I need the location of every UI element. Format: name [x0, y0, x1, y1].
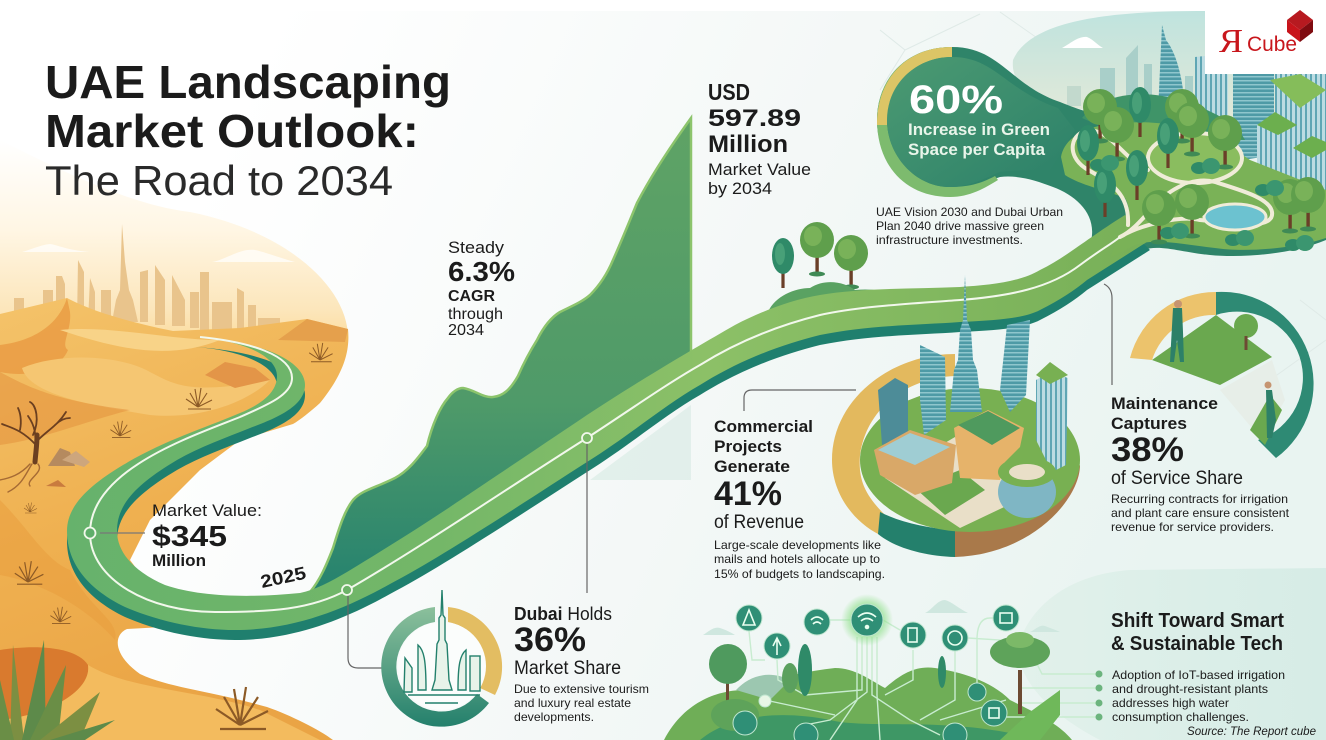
stat: CAGR: through: [448, 306, 503, 323]
road: [67, 215, 1150, 630]
stat: maintenance: [1111, 394, 1290, 534]
stat: smart tech: [1111, 610, 1285, 724]
icons: [733, 594, 1019, 740]
clouds: [703, 600, 1060, 635]
hill trees: [709, 632, 1060, 740]
pond: [1204, 204, 1266, 230]
stat: commercial: [714, 417, 885, 581]
stat: 2034 market value: Million: [708, 131, 788, 158]
stat: CAGR: 6.3%: [448, 256, 515, 287]
stat: maintenance: of Service Share: [1111, 468, 1243, 489]
title: Market Outlook:: [45, 105, 419, 157]
stat: green space: 60%: [909, 78, 1003, 122]
leader dots: [1096, 670, 1102, 720]
stat: Dubai share: [514, 604, 649, 724]
panel: park lawn and bubble: [877, 47, 1326, 258]
small tree: [1234, 314, 1258, 338]
title: UAE Landscaping: [45, 56, 451, 108]
logo: Я: [1219, 23, 1243, 60]
mall blocks: [874, 410, 1056, 518]
stat: green space: Space per Capita: [908, 140, 1046, 159]
year label 2025: 2025: [259, 563, 308, 592]
desert rocks: [46, 448, 90, 487]
park lawn: [1061, 122, 1326, 258]
tree backdrop: [1082, 94, 1245, 140]
text: vision: UAE Vision 2030 and Dubai Urban: [876, 205, 1063, 219]
stat: Dubai share: Market Share: [514, 658, 621, 679]
source note: Source: The Report cube: [1187, 724, 1316, 738]
text: vision: [876, 205, 1063, 247]
stat: CAGR: CAGR: [448, 288, 495, 305]
stat: 2025 market value: [152, 501, 262, 570]
sand dunes: [0, 298, 348, 740]
title: [45, 56, 451, 204]
text: vision: Plan 2040 drive massive green: [876, 219, 1044, 233]
stat: smart tech: Shift Toward Smart: [1111, 610, 1284, 632]
chart: growth area: [310, 118, 691, 592]
stat: commercial: 41%: [714, 475, 782, 513]
gardeners: [1170, 308, 1184, 362]
desert shrubs: [15, 343, 333, 729]
stat: commercial: Generate: [714, 457, 790, 476]
stat: commercial: Large-scale developments like: [714, 538, 881, 552]
desert clouds: [22, 244, 295, 262]
stat: maintenance: Captures: [1111, 414, 1187, 433]
desert sky: [0, 140, 348, 340]
road nodes and leader lines: [84, 284, 1112, 668]
stat: Dubai share: Due to extensive tourism: [514, 682, 649, 696]
stat: commercial: 15% of budgets to landscaping.: [714, 567, 885, 581]
stat: smart tech: consumption challenges.: [1112, 710, 1249, 724]
stat: CAGR: [448, 238, 515, 339]
buildings: [1195, 56, 1326, 198]
dead tree: [0, 402, 70, 492]
stat: 2025 market value: $345: [152, 521, 227, 553]
road trees: [768, 222, 900, 312]
stat: smart tech: and drought-resistant plants: [1112, 682, 1268, 696]
stat: commercial: mails and hotels allocate up to: [714, 552, 880, 566]
stat: Dubai share: and luxury real estate: [514, 696, 631, 710]
title: The Road to 2034: [45, 157, 393, 204]
icon: commercial district disc: [832, 275, 1080, 557]
stat: 2025 market value: Million: [152, 551, 206, 570]
stat: 2034 market value: USD: [708, 79, 750, 105]
stat: Dubai share: 36%: [514, 621, 586, 659]
park paths: [1073, 130, 1272, 237]
stat: maintenance: Recurring contracts for irrigation: [1111, 492, 1288, 506]
stat: 2034 market value: by 2034: [708, 179, 772, 198]
stat: maintenance: Maintenance: [1111, 394, 1218, 413]
stat: 2034 market value: [708, 79, 811, 198]
disc lawn: [860, 388, 1080, 532]
panel: pale tech background: [1019, 568, 1326, 740]
stat: smart tech: Adoption of IoT-based irrigation: [1112, 668, 1285, 682]
park skyline: [1067, 25, 1193, 112]
disc ring: [832, 354, 955, 535]
stat: 2034 market value: 597.89: [708, 105, 801, 132]
stat: commercial: Commercial: [714, 417, 813, 436]
road shadow edge: [67, 225, 1150, 640]
panel: park backdrop: [877, 11, 1326, 282]
stat: green space: Increase in Green: [908, 120, 1050, 139]
stat: smart tech: addresses high water: [1112, 696, 1229, 710]
stat: 2025 market value: Market Value:: [152, 501, 262, 520]
icon: wifi: [743, 610, 1012, 718]
stat: 2034 market value: Market Value: [708, 160, 811, 179]
text: vision: infrastructure investments.: [876, 233, 1023, 247]
bubble fill: [887, 57, 1075, 187]
bottom dune: [0, 647, 88, 720]
park trees: [1077, 87, 1325, 251]
icon: maintenance gauge: [1130, 292, 1314, 458]
stat: smart tech: & Sustainable Tech: [1111, 633, 1283, 655]
hills: [664, 667, 1072, 740]
panel: desert landscape: [0, 140, 348, 740]
towers: [878, 275, 1068, 472]
dark body of bubble and park base: [877, 47, 1326, 282]
stat: CAGR: Steady: [448, 238, 505, 257]
stat: maintenance: and plant care ensure consistent: [1111, 506, 1290, 520]
stat: commercial: of Revenue: [714, 512, 804, 533]
stat: maintenance: revenue for service providers.: [1111, 520, 1274, 534]
agave plant: [0, 640, 115, 740]
logo: [1205, 0, 1326, 74]
stat: CAGR: 2034: [448, 322, 484, 339]
logo: Cube: [1247, 33, 1297, 56]
cloud: [1062, 37, 1103, 48]
lawn: [1152, 315, 1272, 385]
road centre line: [90, 237, 1120, 612]
stat: commercial: Projects: [714, 437, 782, 456]
stat: Dubai share: developments.: [514, 710, 594, 724]
bubble rim: [877, 47, 998, 197]
stat: green space: [908, 78, 1050, 159]
park sky: [1013, 11, 1326, 170]
desert skyline: [14, 224, 280, 332]
circuit lines: [749, 618, 1099, 740]
stat: Dubai share: Dubai Holds: [514, 604, 612, 624]
illustration: smart tech hills: [664, 594, 1102, 740]
icon: Dubai ring: [381, 590, 502, 727]
stat: maintenance: 38%: [1111, 431, 1184, 469]
